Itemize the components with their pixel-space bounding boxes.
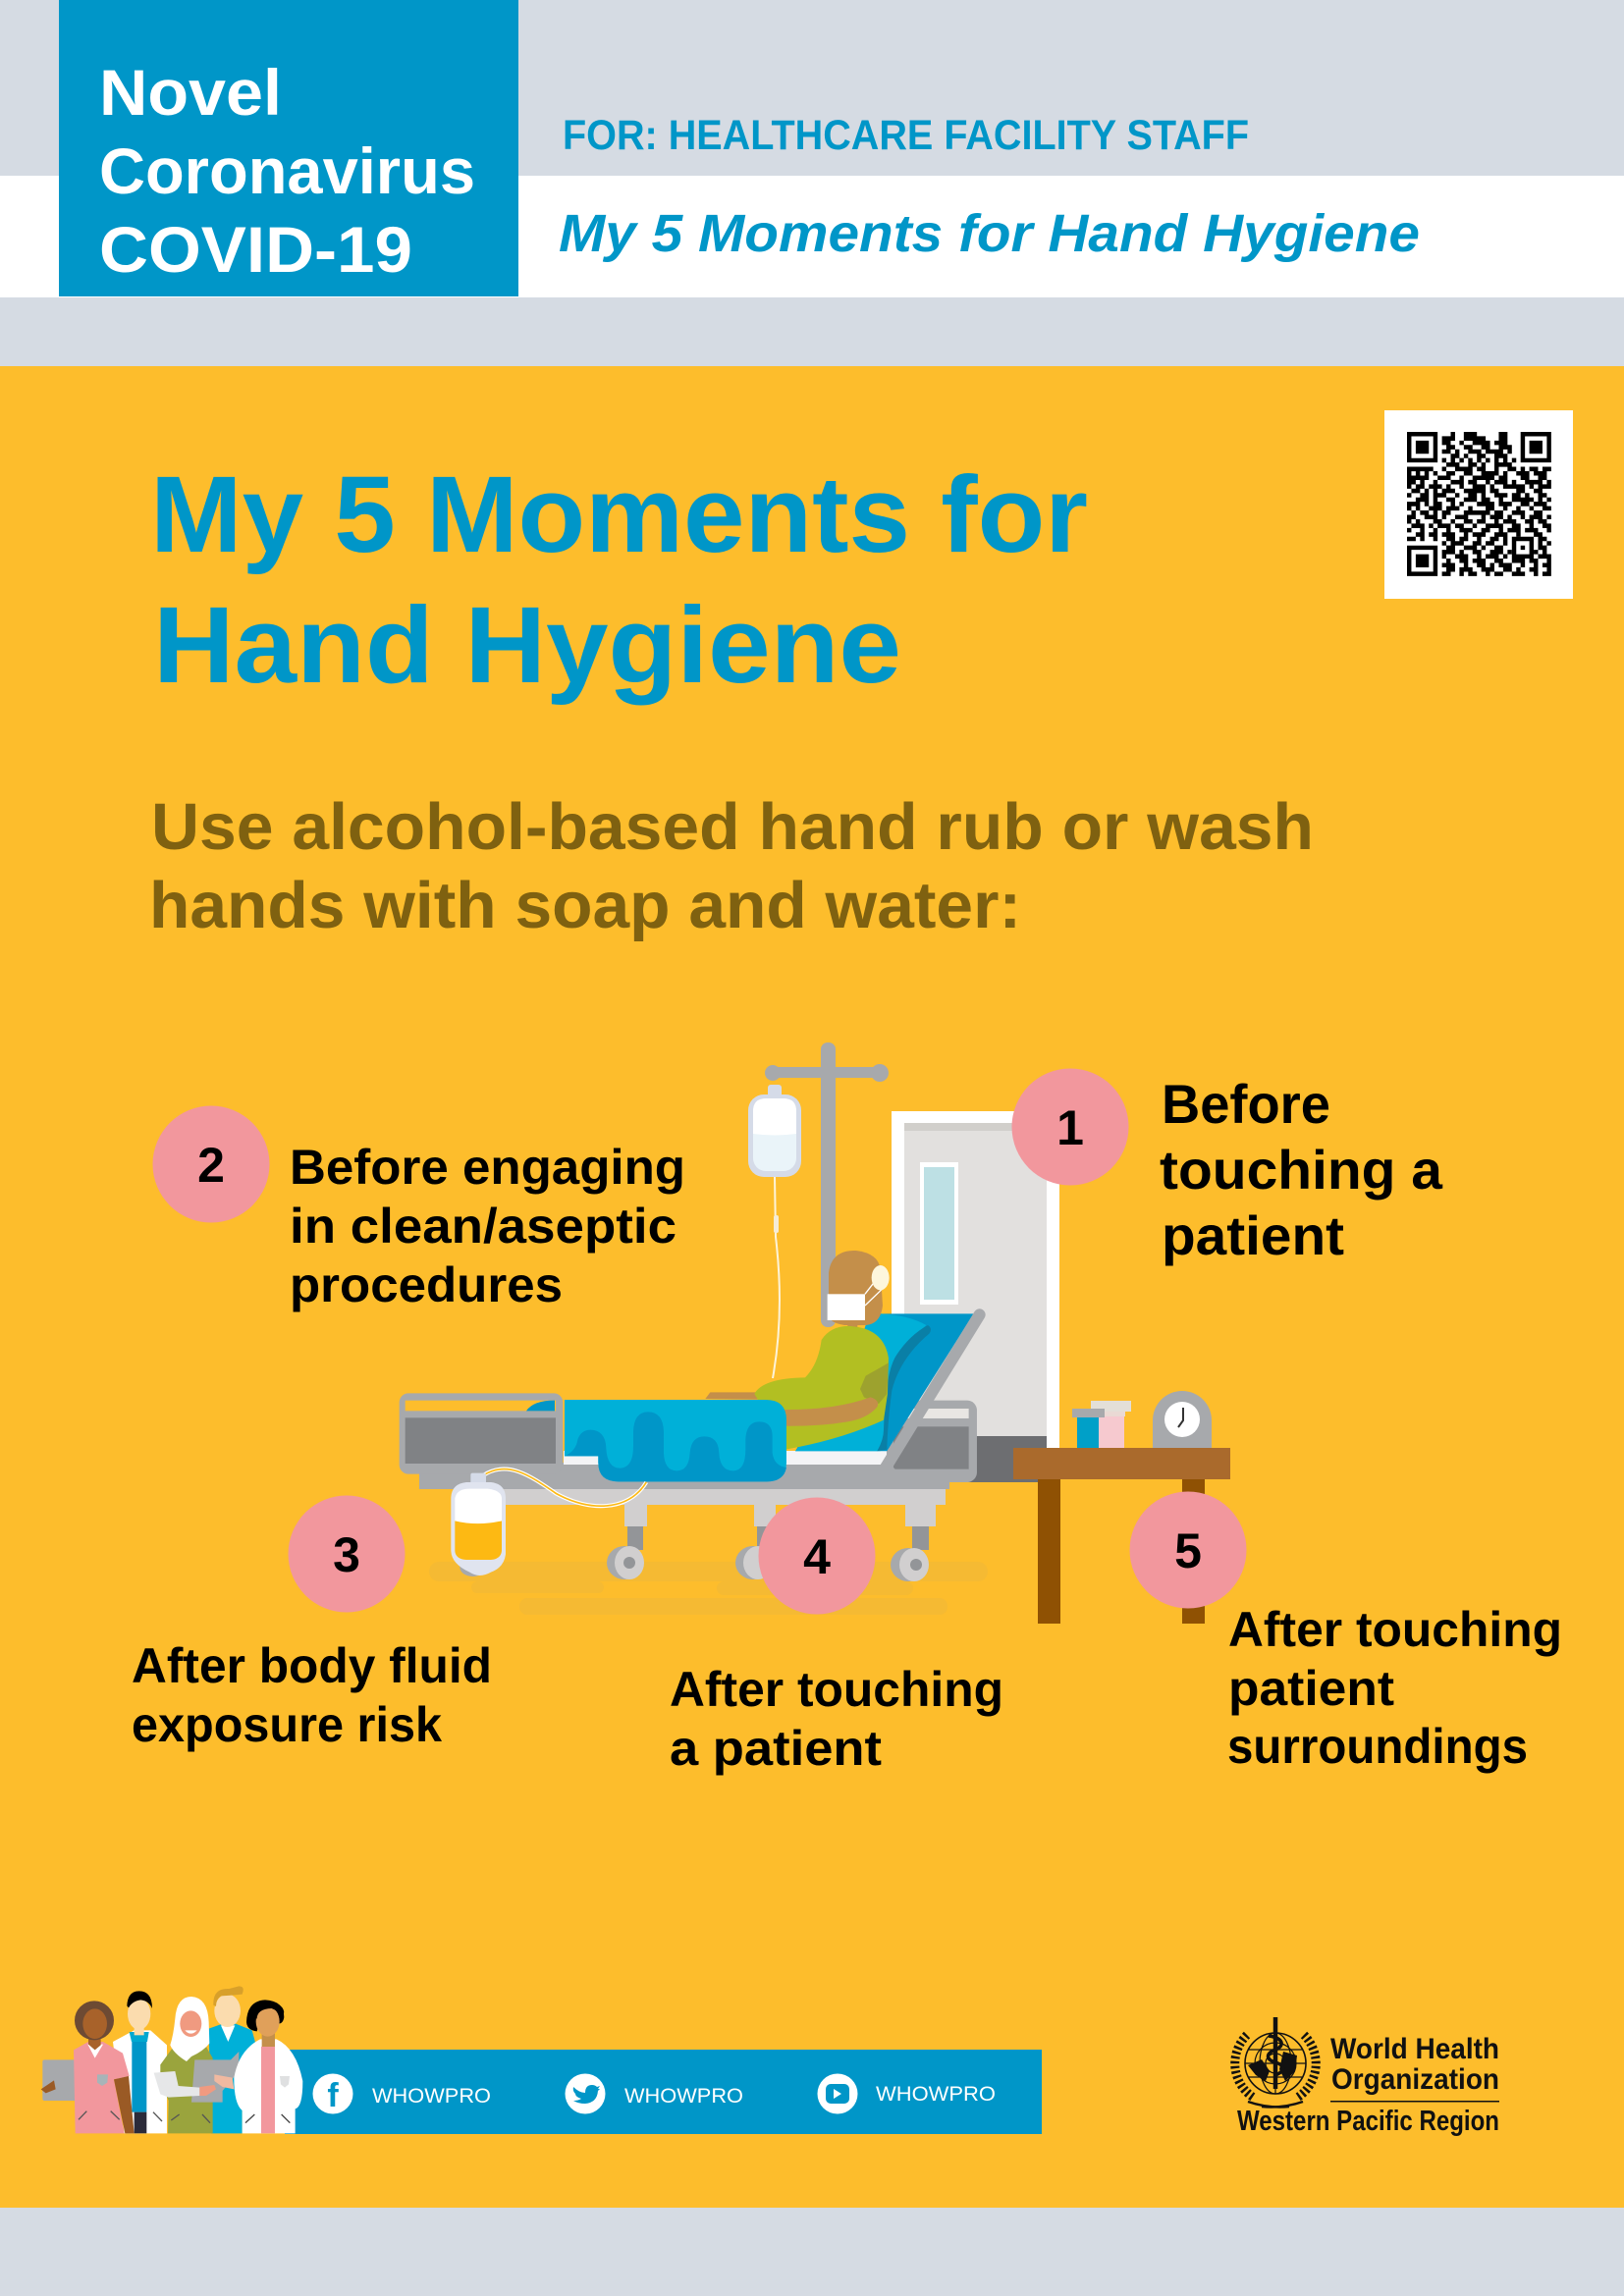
WHO emblem bbox=[1235, 2017, 1316, 2107]
youtube handle: WHOWPRO bbox=[876, 2083, 996, 2106]
moment 3: exposure risk bbox=[132, 1697, 442, 1752]
header subtitle: My 5 Moments for Hand Hygiene bbox=[559, 204, 1420, 263]
moment 5 bbox=[1129, 1492, 1562, 1774]
WHO logo: Western Pacific Region bbox=[1237, 2106, 1499, 2137]
table with items bbox=[1013, 1391, 1230, 1624]
iv bag bbox=[748, 1085, 801, 1378]
instruction text: hands with soap and water: bbox=[149, 869, 1021, 942]
WHO logo: Organization bbox=[1331, 2063, 1499, 2096]
facebook handle: WHOWPRO bbox=[372, 2085, 491, 2108]
worker 5: woman doctor in white coat bbox=[234, 2000, 302, 2133]
instruction text: Use alcohol-based hand rub or wash bbox=[151, 790, 1314, 864]
moment 4 bbox=[670, 1498, 1003, 1776]
moment 5: After touching bbox=[1228, 1602, 1562, 1657]
twitter handle: WHOWPRO bbox=[624, 2085, 743, 2108]
moment 2: 2 bbox=[197, 1138, 225, 1193]
iv pole bbox=[765, 1042, 889, 1327]
moment 1: 1 bbox=[1056, 1100, 1084, 1155]
moment 4: a patient bbox=[670, 1721, 882, 1776]
worker 1: woman in pink scrubs with tablet bbox=[41, 2001, 135, 2133]
moment 4: After touching bbox=[670, 1662, 1003, 1717]
social media bar bbox=[285, 2050, 1042, 2134]
moment 5: surroundings bbox=[1227, 1719, 1528, 1774]
moment 3: 3 bbox=[333, 1527, 360, 1582]
header white band bbox=[0, 176, 1624, 297]
instruction text bbox=[149, 790, 1314, 942]
urine drainage bag bbox=[451, 1468, 646, 1576]
audience line: FOR: HEALTHCARE FACILITY STAFF bbox=[563, 112, 1249, 159]
moment 5: 5 bbox=[1174, 1523, 1202, 1578]
moment 3: After body fluid bbox=[132, 1638, 492, 1693]
illustration: hospital bed scene bbox=[400, 1042, 1230, 1624]
worker 2: man in lab coat bbox=[113, 1991, 167, 2133]
icon: youtube bbox=[817, 2073, 858, 2114]
foot rail bbox=[400, 1393, 563, 1474]
backrest and pillow bbox=[795, 1313, 980, 1468]
bed frame bbox=[419, 1451, 949, 1581]
hand over tablet bbox=[214, 2074, 234, 2089]
header badge: Novel Coronavirus COVID-19: Novel bbox=[99, 56, 282, 129]
worker 3: woman in hijab bbox=[154, 1997, 239, 2133]
moment 2: Before engaging bbox=[290, 1140, 685, 1195]
worker 4: blond man in blue scrubs bbox=[209, 1986, 257, 2133]
main title bbox=[150, 454, 1088, 706]
door bbox=[892, 1111, 1059, 1482]
moment 1 bbox=[1011, 1068, 1443, 1266]
QR code bbox=[1384, 410, 1573, 599]
bed head rail bbox=[884, 1401, 977, 1482]
moment 2 bbox=[153, 1105, 685, 1312]
icon: twitter bbox=[566, 2073, 605, 2114]
moment 5: patient bbox=[1228, 1661, 1394, 1716]
moment 1: patient bbox=[1162, 1204, 1344, 1266]
icon: facebook bbox=[312, 2073, 353, 2114]
moment 1: Before bbox=[1162, 1073, 1330, 1135]
moment 2: in clean/aseptic bbox=[290, 1199, 677, 1254]
icon: facebook: f bbox=[327, 2077, 339, 2114]
illustration: healthcare workers group bbox=[41, 1986, 302, 2133]
patient bbox=[705, 1251, 890, 1450]
header badge: Novel Coronavirus COVID-19 bbox=[59, 0, 518, 296]
header badge: Novel Coronavirus COVID-19: Coronavirus bbox=[99, 134, 475, 207]
blanket bbox=[565, 1400, 786, 1481]
moment 1: touching a bbox=[1160, 1139, 1443, 1201]
header badge: Novel Coronavirus COVID-19: COVID-19 bbox=[99, 213, 412, 286]
moment 4: 4 bbox=[803, 1529, 831, 1584]
main title: Hand Hygiene bbox=[153, 585, 901, 706]
floor shadow bbox=[429, 1562, 988, 1615]
WHO logo bbox=[1235, 2017, 1499, 2137]
moment 2: procedures bbox=[290, 1257, 563, 1312]
moment 3 bbox=[132, 1496, 492, 1752]
main title: My 5 Moments for bbox=[150, 454, 1088, 575]
WHO logo: World Health bbox=[1330, 2033, 1499, 2065]
